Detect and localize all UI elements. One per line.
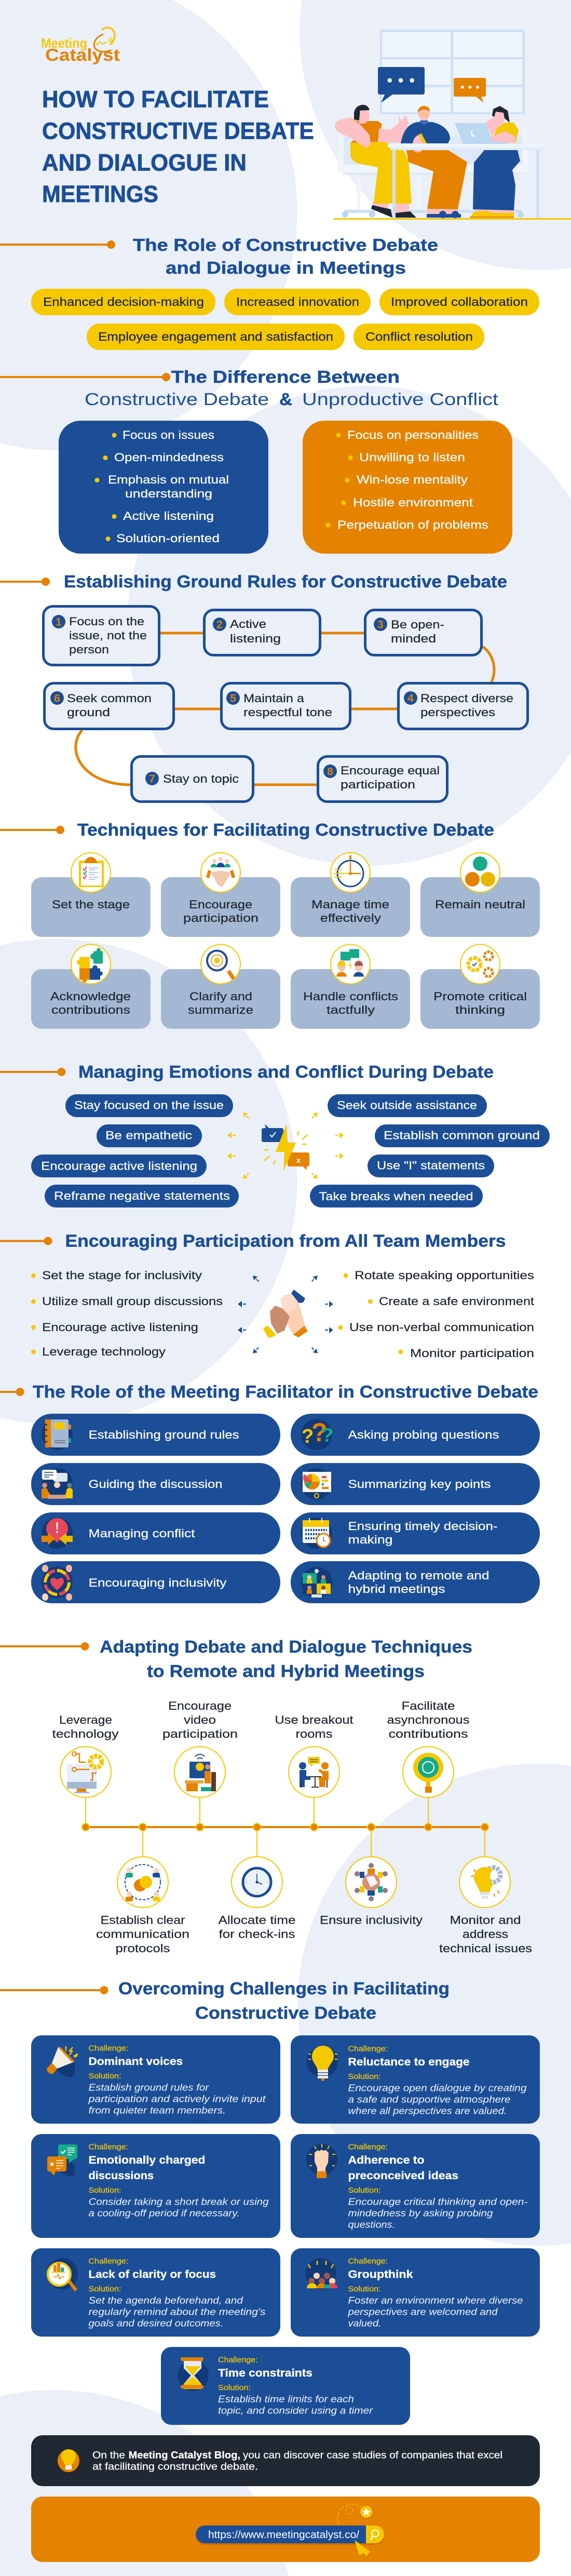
icon: question marks: ? [321, 1425, 333, 1446]
card: clarify and summarize: summarize [188, 1003, 253, 1016]
card: clarify and summarize: Clarify and [189, 990, 252, 1003]
card: lack of clarity or focus [31, 2248, 280, 2337]
rule 3: Be open- [391, 618, 444, 631]
step: establish clear communication protocols [96, 1857, 189, 1955]
title [42, 86, 314, 207]
heading: Constructive Debate [195, 2003, 376, 2022]
card: adherence to preconceived ideas: Challenge: [348, 2143, 388, 2151]
icon: question marks [302, 1418, 333, 1447]
rule 6: 6 [54, 693, 60, 704]
card: time constraints: Time constraints [218, 2367, 312, 2379]
card: promote critical thinking: Promote critical [433, 990, 527, 1003]
connectors [76, 633, 494, 785]
timeline [82, 1798, 488, 1856]
heading: & [279, 390, 292, 409]
section marker [0, 1237, 52, 1245]
step: establish clear communication protocols: Establish clear [101, 1913, 185, 1927]
icon: calendar and clock [303, 1518, 330, 1547]
icon: discussion group [42, 1470, 73, 1499]
benefit pills: Enhanced decision-making [43, 295, 204, 308]
card: adherence to preconceived ideas: Adherence to [348, 2154, 425, 2166]
icon: question marks: ? [302, 1426, 314, 1447]
list right: Monitor participation [410, 1347, 534, 1360]
heading: The Difference Between [171, 367, 400, 386]
card: adherence to preconceived ideas [291, 2134, 540, 2238]
card: reluctance to engage: Encourage open dialogue by creating [348, 2083, 526, 2093]
rule 8: 8 [327, 766, 333, 778]
icon: chat bubbles [47, 2144, 77, 2176]
logo: Meeting Catalyst: Meeting [41, 35, 87, 51]
person: woman in orange shirt [335, 105, 416, 218]
list left: Leverage technology [42, 1345, 166, 1358]
card: dominant voices: from quieter team members. [88, 2105, 226, 2116]
card: handle conflicts tactfully: Handle conflicts [303, 990, 398, 1003]
rule 3 [365, 610, 482, 655]
card: emotionally charged discussions: Solution: [88, 2186, 121, 2195]
icon: stacked hands [263, 1290, 308, 1337]
heading: to Remote and Hybrid Meetings [147, 1661, 425, 1681]
step: facilitate asynchronous contributions [387, 1699, 469, 1797]
card: dominant voices [31, 2035, 280, 2124]
icon: puzzle pieces [77, 948, 103, 983]
card: adherence to preconceived ideas: preconceived ideas [348, 2170, 458, 2182]
rule 7: 7 [149, 773, 155, 785]
step: allocate time for check-ins: for check-ins [219, 1928, 295, 1940]
icon: stopwatch [334, 855, 363, 887]
heading: Adapting Debate and Dialogue Techniques [100, 1637, 472, 1656]
section 9: overcoming challenges [0, 1979, 540, 2425]
rule 8: participation [341, 778, 415, 791]
speech bubble orange [454, 78, 486, 103]
step: encourage video participation: participation [162, 1727, 238, 1740]
card: dominant voices: participation and actively invite input [88, 2094, 266, 2104]
card: emotionally charged discussions: a cooling-off period if necessary. [88, 2208, 240, 2219]
step: ensure inclusivity [320, 1857, 423, 1927]
rule 6: ground [67, 706, 110, 719]
icon: raised fist [309, 2144, 335, 2178]
icon: bulb and gear [471, 1867, 500, 1899]
pills: strategies: Reframe negative statements [54, 1189, 230, 1202]
step: establish clear communication protocols: protocols [115, 1942, 170, 1955]
person: man in blue shirt [401, 106, 467, 218]
logo: Meeting Catalyst: Catalyst [45, 45, 120, 64]
icon: two people talking [299, 1757, 329, 1788]
card: lack of clarity or focus: goals and desired outcomes. [88, 2318, 223, 2329]
card: reluctance to engage [291, 2035, 540, 2124]
section marker [0, 373, 170, 381]
section 3: establishing ground rules [0, 572, 527, 802]
heading: Establishing Ground Rules for Constructive Debate [64, 572, 507, 591]
card: lack of clarity or focus: Solution: [88, 2285, 121, 2293]
icon: three circles [465, 856, 495, 887]
icon: light bulb [308, 2046, 337, 2081]
card: acknowledge contributions [31, 944, 151, 1029]
panel: constructive debate: Emphasis on mutual [108, 473, 229, 486]
card: groupthink: Solution: [348, 2285, 381, 2293]
card: lack of clarity or focus: Challenge: [88, 2257, 128, 2265]
rule 1 [44, 607, 159, 665]
section marker [0, 1068, 65, 1076]
step: allocate time for check-ins: Allocate time [218, 1913, 296, 1927]
icon: hourglass [178, 2357, 209, 2391]
table [388, 144, 544, 218]
card: clarify and summarize [161, 944, 280, 1029]
card: dominant voices: Challenge: [88, 2044, 128, 2052]
card: groupthink: Foster an environment where diverse [348, 2296, 523, 2306]
card: acknowledge contributions: Acknowledge [50, 990, 131, 1003]
section 7: role of the meeting facilitator [0, 1382, 540, 1603]
benefit pills: Employee engagement and satisfaction [98, 330, 333, 343]
item: adapting to remote and hybrid [291, 1561, 540, 1603]
icon: video call at desk [185, 1754, 216, 1791]
card: dominant voices: Establish ground rules for [88, 2083, 209, 2093]
section 8: adapting debate to remote and hybrid [0, 1637, 532, 1955]
rule 5 [221, 683, 350, 729]
rule 2: 2 [216, 619, 223, 630]
speech bubble blue [378, 67, 425, 103]
item: managing conflict: Managing conflict [88, 1527, 195, 1540]
icon: group of people [307, 2261, 337, 2288]
icon: loop magnifier [413, 1753, 443, 1793]
heading: Techniques for Facilitating Constructive Debate [77, 820, 494, 839]
card: reluctance to engage: Challenge: [348, 2045, 388, 2054]
rule 5: 5 [230, 693, 236, 704]
card: emotionally charged discussions: Challenge: [88, 2143, 128, 2151]
step: leverage technology: Leverage [59, 1713, 112, 1726]
card: lack of clarity or focus: regularly remind about the meeting's [88, 2307, 266, 2317]
item: ensuring timely decision-making: Ensuring timely decision- [348, 1520, 497, 1533]
step: facilitate asynchronous contributions: contributions [388, 1727, 468, 1740]
search bar [196, 2526, 385, 2545]
card: adherence to preconceived ideas: Encourage critical thinking and open- [348, 2197, 528, 2207]
rule 6: Seek common [67, 692, 152, 705]
step: facilitate asynchronous contributions: Facilitate [402, 1699, 455, 1712]
step: ensure inclusivity: Ensure inclusivity [320, 1913, 423, 1927]
section 2: the difference between [0, 367, 512, 554]
panel: constructive debate: Active listening [123, 509, 214, 522]
step: monitor and address technical issues: Monitor and [450, 1913, 521, 1927]
rule 6 [45, 683, 173, 729]
icon: video grid [303, 1569, 331, 1598]
card: groupthink: Groupthink [348, 2269, 413, 2280]
step: monitor and address technical issues [439, 1857, 532, 1955]
section 5: managing emotions and conflict [0, 1062, 550, 1208]
rule 1: 1 [56, 616, 62, 628]
list right: Create a safe environment [379, 1295, 534, 1308]
item: guiding the discussion [31, 1463, 280, 1505]
heading [100, 1637, 472, 1681]
card: time constraints: Establish time limits for each [218, 2394, 354, 2405]
card: dominant voices: Solution: [88, 2072, 121, 2081]
card: emotionally charged discussions: discussions [88, 2170, 154, 2182]
card: reluctance to engage: where all perspectives are valued. [348, 2105, 507, 2116]
arrows [238, 1274, 333, 1355]
heading: Encouraging Participation from All Team Members [65, 1231, 506, 1251]
logo: Meeting Catalyst [41, 28, 120, 64]
icon: question marks: ? [311, 1418, 328, 1447]
card: time constraints: topic, and consider using a timer [218, 2406, 373, 2416]
icon: notebook [44, 1419, 71, 1447]
panel: unproductive conflict: Win-lose mentality [357, 473, 468, 486]
item: guiding the discussion: Guiding the discussion [88, 1478, 222, 1491]
icon: two people arguing [336, 949, 364, 976]
icon: dashed path with star [337, 2504, 372, 2528]
icon: conflict lightning [262, 1124, 309, 1171]
step: leverage technology: technology [52, 1727, 118, 1740]
item: summarizing key points [291, 1463, 540, 1505]
card: remain neutral: Remain neutral [435, 898, 525, 911]
card: lack of clarity or focus: Set the agenda beforehand, and [88, 2296, 243, 2306]
person: woman with laptop [455, 106, 520, 218]
heading: Constructive Debate [85, 390, 269, 409]
list left: Utilize small group discussions [42, 1295, 223, 1308]
icon: bulb [58, 2449, 79, 2472]
icon: gears [468, 951, 493, 976]
rule 4: 4 [407, 693, 414, 704]
step: use breakout rooms [275, 1713, 353, 1797]
search bar: https://www.meetingcatalyst.co/ [208, 2529, 359, 2541]
step: monitor and address technical issues: address [463, 1928, 508, 1940]
card: lack of clarity or focus: Lack of clarity or focus [88, 2269, 216, 2280]
card: manage time effectively [291, 853, 410, 937]
callout: blog note: at facilitating constructive debate. [92, 2461, 258, 2472]
rule 4: perspectives [420, 706, 495, 719]
heading [85, 367, 498, 409]
item: adapting to remote and hybrid: hybrid meetings [348, 1582, 445, 1595]
pills: strategies: Take breaks when needed [319, 1190, 473, 1203]
card: groupthink: Challenge: [348, 2257, 388, 2265]
item: establishing ground rules [31, 1414, 280, 1456]
list right: Rotate speaking opportunities [355, 1269, 534, 1282]
rule 7 [132, 756, 253, 802]
item: managing conflict [31, 1512, 280, 1554]
card: time constraints: Challenge: [218, 2356, 257, 2364]
step: establish clear communication protocols: communication [96, 1928, 189, 1940]
icon: conflict lightning: x [296, 1156, 301, 1165]
list left [31, 1269, 223, 1358]
rule 2: Active [230, 618, 266, 630]
heading [118, 1979, 450, 2022]
section 6: encouraging participation [0, 1231, 534, 1360]
icon: heart circle [42, 1565, 72, 1601]
card: groupthink: valued. [348, 2318, 381, 2329]
section 1: the role of constructive debate [0, 235, 539, 350]
section 4: techniques for facilitating [0, 820, 540, 1029]
list left: Encourage active listening [42, 1321, 198, 1334]
title: HOW TO FACILITATE [42, 86, 269, 112]
panel: unproductive conflict: Perpetuation of problems [337, 518, 488, 531]
heading [133, 235, 438, 277]
card: encourage participation: participation [183, 911, 259, 924]
heading: Overcoming Challenges in Facilitating [118, 1979, 450, 1998]
benefit pills: Conflict resolution [365, 330, 473, 343]
step: use breakout rooms: Use breakout [275, 1713, 353, 1726]
rule 8 [318, 756, 447, 802]
panel: unproductive conflict: Unwilling to listen [359, 451, 465, 464]
rule 2: listening [230, 632, 281, 645]
card: emotionally charged discussions [31, 2134, 280, 2238]
heading: Unproductive Conflict [302, 390, 498, 409]
section marker [0, 578, 50, 586]
card: acknowledge contributions: contributions [51, 1003, 130, 1016]
callout: blog note: On the [92, 2449, 125, 2461]
card: adherence to preconceived ideas: questions. [348, 2220, 395, 2230]
title: MEETINGS [42, 181, 158, 207]
card: encourage participation [161, 853, 280, 937]
icon: conflict pin [42, 1518, 73, 1545]
arrows [227, 1111, 344, 1180]
benefit pills [31, 289, 539, 350]
card: manage time effectively: Manage time [311, 898, 389, 911]
panel: constructive debate: Focus on issues [123, 428, 214, 441]
rule 4 [399, 683, 527, 729]
hero illustration: three people talking at a table [334, 30, 571, 220]
icon: monitor circuit [67, 1752, 102, 1793]
panel: constructive debate: Solution-oriented [116, 532, 220, 545]
step: facilitate asynchronous contributions: asynchronous [387, 1713, 469, 1726]
card: time constraints: Solution: [218, 2384, 251, 2392]
card: groupthink [291, 2248, 540, 2337]
step: monitor and address technical issues: technical issues [439, 1942, 532, 1955]
item: asking probing questions: Asking probing questions [348, 1428, 499, 1441]
item: adapting to remote and hybrid: Adapting to remote and [348, 1569, 489, 1582]
item: establishing ground rules: Establishing ground rules [88, 1428, 239, 1441]
icon: cursor [355, 2540, 370, 2556]
pills: strategies: Be empathetic [105, 1129, 192, 1142]
rule 1: Focus on the [69, 615, 144, 628]
icon: ring of people [125, 1864, 160, 1901]
icon: handshake [206, 857, 235, 887]
item: asking probing questions [291, 1414, 540, 1456]
card: promote critical thinking [420, 944, 540, 1029]
pills: strategies: Seek outside assistance [337, 1099, 477, 1111]
heading: The Role of Constructive Debate [133, 235, 438, 254]
step: leverage technology [52, 1713, 118, 1797]
card: handle conflicts tactfully [291, 944, 410, 1029]
step: encourage video participation: Encourage [168, 1699, 232, 1712]
card: reluctance to engage: Solution: [348, 2073, 381, 2081]
card: handle conflicts tactfully: tactfully [327, 1003, 375, 1016]
list right [338, 1269, 534, 1360]
benefit pills: Increased innovation [236, 295, 359, 308]
icon: team around table [355, 1863, 388, 1901]
pills: strategies: Encourage active listening [41, 1159, 197, 1173]
chairs [338, 129, 528, 218]
panel: unproductive conflict [303, 421, 512, 554]
callout: blog note: you can discover case studies of companies that excel [243, 2449, 502, 2461]
floor line [334, 218, 571, 220]
card: time constraints [161, 2347, 410, 2425]
title: AND DIALOGUE IN [42, 150, 247, 176]
rule 4: Respect diverse [420, 692, 513, 705]
panel: constructive debate: Open-mindedness [114, 451, 224, 464]
icon: magnifier with chart [48, 2263, 77, 2291]
rule 2 [205, 610, 320, 655]
panel: unproductive conflict: Focus on personalities [347, 428, 479, 441]
rule 1: issue, not the [69, 629, 147, 642]
step: use breakout rooms: rooms [296, 1727, 332, 1740]
item: summarizing key points: Summarizing key points [348, 1478, 491, 1491]
panel: constructive debate: understanding [125, 487, 212, 500]
card: set the stage [31, 853, 151, 937]
step: allocate time for check-ins [218, 1857, 296, 1940]
icon: wall clock [243, 1868, 271, 1896]
card: adherence to preconceived ideas: mindedness by asking probing [348, 2208, 493, 2219]
card: emotionally charged discussions: Emotionally charged [88, 2154, 206, 2166]
item: encouraging inclusivity: Encouraging inclusivity [88, 1576, 226, 1589]
section marker [0, 1388, 24, 1396]
icon: clipboard [79, 857, 104, 887]
icon: megaphone [47, 2046, 78, 2077]
window [380, 30, 525, 114]
card: reluctance to engage: Reluctance to engage [348, 2056, 469, 2068]
rule 3: minded [391, 632, 436, 645]
card: reluctance to engage: a safe and supportive atmosphere [348, 2094, 511, 2104]
panel: unproductive conflict: Hostile environment [353, 496, 473, 509]
icon: magnifier target [207, 950, 235, 980]
pills: strategies: Stay focused on the issue [74, 1099, 224, 1111]
rule 5: respectful tone [243, 706, 332, 719]
rule 7: Stay on topic [163, 772, 239, 785]
rule 1: person [69, 643, 109, 656]
card: remain neutral [420, 853, 540, 937]
icon: presentation chart [303, 1472, 331, 1498]
pills: strategies: Establish common ground [384, 1129, 540, 1142]
step: encourage video participation: video [184, 1713, 216, 1726]
call to action: website search bar [31, 2497, 540, 2562]
heading: Managing Emotions and Conflict During Debate [78, 1062, 494, 1081]
section marker [0, 826, 64, 834]
card: promote critical thinking: thinking [455, 1003, 505, 1016]
card: manage time effectively: effectively [320, 911, 381, 924]
heading: The Role of the Meeting Facilitator in Constructive Debate [33, 1382, 538, 1401]
rule 5: Maintain a [243, 692, 305, 705]
card: adherence to preconceived ideas: Solution: [348, 2186, 381, 2195]
section marker [0, 1642, 89, 1651]
title: CONSTRUCTIVE DEBATE [42, 117, 314, 144]
card: encourage participation: Encourage [189, 898, 252, 911]
pills: strategies: Use "I" statements [377, 1159, 485, 1172]
callout: blog note: Meeting Catalyst Blog, [129, 2449, 240, 2461]
step: encourage video participation [162, 1699, 238, 1797]
rule 3: 3 [377, 619, 384, 630]
list left: Set the stage for inclusivity [42, 1269, 202, 1282]
rule 8: Encourage equal [341, 764, 440, 777]
heading: and Dialogue in Meetings [166, 258, 406, 277]
section marker [0, 240, 115, 249]
card: dominant voices: Dominant voices [88, 2056, 183, 2068]
card: set the stage: Set the stage [52, 898, 130, 911]
section marker [0, 1986, 108, 1994]
callout: blog note [31, 2435, 540, 2486]
card: groupthink: perspectives are welcomed and [347, 2307, 498, 2317]
panel: constructive debate [59, 421, 268, 554]
item: ensuring timely decision-making [291, 1512, 540, 1554]
item: ensuring timely decision-making: making [348, 1533, 392, 1546]
card: emotionally charged discussions: Consider taking a short break or using [88, 2197, 269, 2207]
item: encouraging inclusivity [31, 1561, 280, 1603]
benefit pills: Improved collaboration [391, 295, 528, 308]
list right: Use non-verbal communication [349, 1321, 534, 1334]
pills: strategies [31, 1094, 550, 1208]
